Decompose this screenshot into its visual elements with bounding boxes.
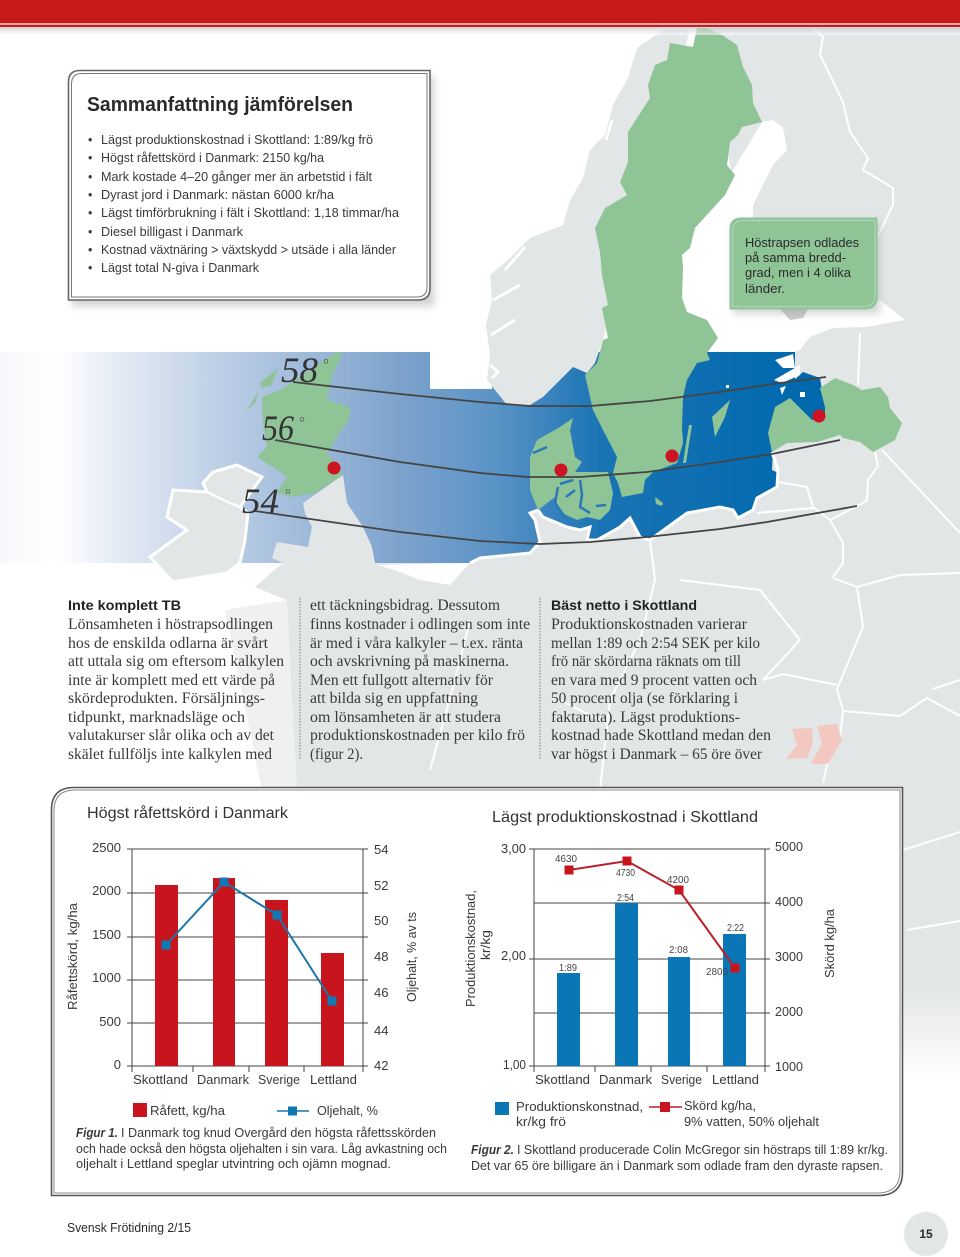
summary list: • [88,133,92,147]
Latvia [768,378,902,452]
land: continental coast [470,452,960,620]
summary list: • [88,261,92,275]
figure 1 caption: oljehalt i Lettland speglar utvintring och ojämn mognad. [76,1157,391,1171]
continental coastline [470,452,778,563]
summary list: Mark kostade 4–20 gånger mer än arbetstid i fält [101,170,373,184]
chart 2 right axis labels: 4000 [775,894,803,909]
chart 2 value labels: 2:08 [669,945,688,956]
column dividers [300,598,540,760]
chart 1 category labels: Skottland [133,1072,188,1087]
chart 2 value labels: 4730 [616,868,635,879]
chart 1 category labels: Sverige [258,1072,300,1087]
chart 2 right axis labels: 1000 [775,1059,803,1074]
article text column 1: inte är komplett med ett värde på [68,672,275,689]
summary list: Lägst total N-giva i Danmark [101,261,260,275]
chart 2 left axis labels: 3,00 [501,841,526,856]
chart 1 left axis labels: 2500 [92,840,121,855]
article text column 3 [551,597,771,763]
figure 1 caption: I Danmark tog knud Overgård den högsta råfettsskörden [121,1126,436,1140]
chart 1 right axis labels: 52 [374,878,388,893]
article text column 1: skälet fullföljs inte kalkylen med [68,746,272,763]
chart 2 value labels: 4630 [555,854,577,865]
land: Estonia and east [772,320,960,560]
summary list: Lägst produktionskostnad i Skottland: 1:89/kg frö [101,133,373,147]
article text column 2: finns kostnader i odlingen som inte [310,616,530,633]
article text column 2 [310,597,530,763]
article text column 2: Men ett fullgott alternativ för [310,672,494,689]
article text column 2: produktionskostnaden per kilo frö [310,727,525,744]
article text column 1: tidpunkt, marknadsläge och [68,709,245,726]
article text column 3: var högst i Danmark – 65 öre över [551,746,763,763]
summary list: Kostnad växtnäring > växtskydd > utsäde i alla länder [101,243,396,257]
article text column 1: valutakurser slår olika och av det [68,727,275,744]
chart 2 axis titles: Produktionskostnad, [463,890,478,1007]
chart 2 legend: Skörd kg/ha, [684,1098,756,1113]
article text column 2: om lönsamheten är att studera [310,709,501,726]
article text column 3: 50 procent olja (se förklaring i [551,690,739,707]
figure 2 caption: I Skottland producerade Colin McGregor sin höstraps till 1:89 kr/kg. [517,1143,888,1157]
Gotland Oland Bornholm [655,400,730,506]
chart 1 category labels: Lettland [310,1072,357,1087]
chart 2 legend [495,1098,819,1129]
chart 2 value labels [555,854,744,978]
chart 2 axis titles [463,890,837,1007]
white borders [430,28,960,930]
chart 2 yield line [564,856,740,972]
chart 1 title: Högst råfettskörd i Danmark [87,804,289,822]
chart 1 right axis labels [374,842,388,1073]
chart 1 right axis labels: 44 [374,1023,388,1038]
chart 2 right axis labels: 3000 [775,949,803,964]
chart 1 axes and grid [127,849,368,1072]
chart 1 legend: Råfett, kg/ha [150,1103,226,1118]
land: Ireland [150,465,262,582]
chart 1 left axis labels [92,840,121,1072]
chart 2 category labels: Danmark [599,1072,652,1087]
chart 2 axes and grid [529,849,770,1072]
chart 1 category labels [133,1072,357,1087]
summary list: • [88,225,92,239]
chart 2 category labels: Lettland [712,1072,759,1087]
chart 2 left axis labels: 1,00 [503,1057,526,1072]
sea gradient band [0,352,795,563]
latitude labels: 56 [262,408,294,448]
chart 1 category labels: Danmark [197,1072,249,1087]
chart 1 left axis labels: 1500 [92,927,121,942]
article text column 3: frö när skördarna räknats om till [551,653,741,670]
pale land left of the article [225,600,297,790]
figure 1 caption: Figur 1. [76,1126,118,1140]
callout: same latitude: Höstrapsen odlades [745,235,859,250]
Norway fjords [490,100,612,378]
article text column 3: kostnad hade Skottland medan den [551,727,771,744]
article text column 2: att bilda sig en uppfattning [310,690,478,707]
article text column 1: Lönsamheten i höstrapsodlingen [68,616,273,633]
article text column 2: ett täckningsbidrag. Dessutom [310,597,500,614]
footer: page number [904,1212,948,1256]
article text column 1: skördeprodukten. Försäljnings- [68,690,265,707]
chart 1 axis titles: Råfettskörd, kg/ha [65,902,80,1010]
summary heading: Sammanfattning jämförelsen [87,94,353,116]
article text column 2: (figur 2). [310,746,363,763]
chart 2 category labels [535,1072,759,1087]
summary list: • [88,188,92,202]
figure 2 caption: Det var 65 öre billigare än i Danmark som odlade fram den dyraste rapsen. [471,1159,883,1173]
chart 1 right axis labels: 42 [374,1058,388,1073]
chart 1 left axis labels: 1000 [92,970,121,985]
summary list: • [88,206,92,220]
latitude labels: ° [323,357,329,373]
chart 1 oil line [162,878,336,1006]
figure 1 caption [76,1126,447,1171]
land: Norway [486,30,690,405]
chart 2 value labels: 2:22 [727,923,744,934]
latitude labels: 58 [281,350,318,390]
land: east and lower continent [255,28,960,1085]
latitude lines [255,377,857,544]
article text column 3: mellan 1:89 och 2:54 SEK per kilo [551,635,760,652]
chart 2 value labels: 4200 [667,875,689,886]
chart 1 axis titles: Oljehalt, % av ts [404,912,419,1002]
Estonian islands [726,354,805,397]
chart 2 value labels: 1:89 [559,963,577,974]
summary list: Högst råfettskörd i Danmark: 2150 kg/ha [101,151,324,165]
chart 1 left axis labels: 2000 [92,883,121,898]
article text column 1 [68,597,284,763]
article text column 2: är med i våra kalkyler – t.ex. ränta [310,635,523,652]
figure 2 caption [471,1143,888,1173]
Sweden [585,28,762,497]
icon: continuation quote marks [786,724,842,764]
callout: same latitude: grad, men i 4 olika [745,265,852,280]
white sliver of North Sea [378,563,470,585]
article text column 1: hos de enskilda odlarna är svårt [68,635,269,652]
chart 2 right axis labels [775,839,803,1074]
Danish belts and fjords [533,447,606,520]
chart 1 axis titles [65,902,419,1010]
article text column 2: och avskrivning på maskinerna. [310,653,509,670]
summary list [88,133,399,275]
Scotland [257,352,350,497]
article text column 1: Inte komplett TB [68,597,181,613]
article text column 1: att uttala sig om eftersom kalkylen [68,653,284,670]
chart 2 value labels: 2:54 [617,893,634,904]
footer: publication name: Svensk Frötidning 2/15 [67,1220,191,1235]
chart 1 right axis labels: 48 [374,949,388,964]
chart 2 axis titles: kr/kg [478,930,493,960]
chart 2 axis titles: Skörd kg/ha [822,908,837,978]
summary list: Lägst timförbrukning i fält i Skottland: 1,18 timmar/ha [101,206,399,220]
latitude labels: ° [285,487,291,503]
chart 1: yield bars and oil line [65,804,447,1171]
figure 2 caption: Figur 2. [471,1143,514,1157]
chart 2 legend: 9% vatten, 50% oljehalt [684,1114,819,1129]
Denmark [530,418,613,520]
land under callout [780,309,808,320]
chart 2 legend: Produktionskonstnad, [516,1099,643,1114]
latitude labels [242,350,329,521]
chart 2 legend: kr/kg frö [516,1114,566,1129]
summary list: Dyrast jord i Danmark: nästan 6000 kr/ha [101,188,334,202]
chart 1 left axis labels: 0 [114,1057,121,1072]
chart 2: production cost bars and yield line [463,809,888,1173]
chart 2 right axis labels: 5000 [775,839,803,854]
chart 1 bars [155,878,344,1066]
location dots [328,410,826,476]
chart 1 right axis labels: 54 [374,842,388,857]
chart 2 category labels: Sverige [661,1072,702,1087]
chart 2 title: Lägst produktionskostnad i Skottland [492,809,758,826]
chart 1 legend [133,1103,378,1118]
land: England [255,475,400,600]
footer: page number: 15 [919,1227,933,1241]
latitude labels: 54 [242,481,279,521]
Gulf of Riga [780,372,825,422]
article text column 3: faktaruta). Lägst produktions- [551,709,740,726]
top red band [0,0,960,35]
summary list: • [88,243,92,257]
Hebrides [247,368,278,410]
summary list: Diesel billigast i Danmark [101,225,244,239]
chart 2 category labels: Skottland [535,1072,590,1087]
Gulf of Bothnia white [682,120,905,360]
chart 2 left axis labels: 2,00 [501,948,526,963]
chart 2 bars [557,903,746,1066]
chart 1 right axis labels: 50 [374,913,388,928]
article text column 3: Bäst netto i Skottland [551,597,697,613]
chart 1 left axis labels: 500 [99,1014,121,1029]
figure 1 caption: och hade också den högsta oljehalten i sin vara. Låg avkastning och [76,1142,447,1156]
latitude labels: ° [299,415,305,431]
panel: summary box [68,70,434,306]
panel: chart box [52,788,902,1196]
chart 2 value labels: 2800 [706,967,728,978]
callout: same latitude: länder. [745,281,785,296]
chart 1 right axis labels: 46 [374,985,388,1000]
article text column 3: Produktionskostnaden varierar [551,616,748,633]
chart 2 right axis labels: 2000 [775,1004,803,1019]
callout: same latitude: på samma bredd- [745,250,846,265]
article text column 3: en vara med 9 procent vatten och [551,672,757,689]
callout: same latitude [730,218,880,314]
summary list: • [88,151,92,165]
chart 1 legend: Oljehalt, % [317,1103,378,1118]
chart 2 left axis labels [501,841,526,1072]
summary list: • [88,170,92,184]
